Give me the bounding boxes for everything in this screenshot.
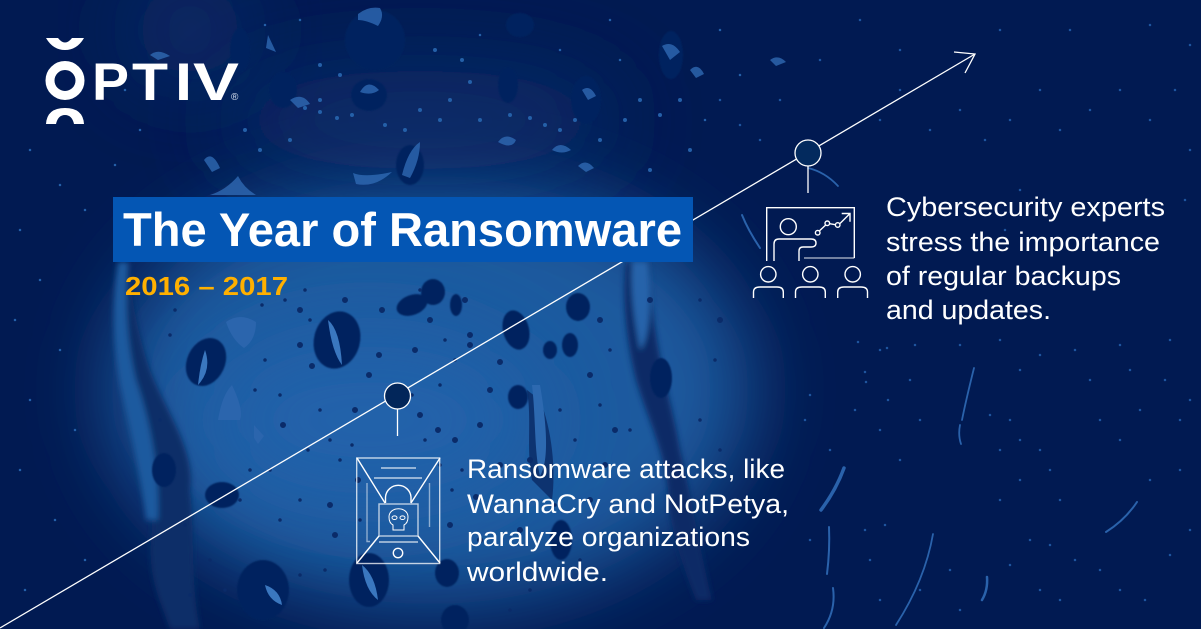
- text: cybersecurity experts: and updates.: [886, 295, 1051, 325]
- title banner: The Year of Ransomware: [123, 203, 682, 256]
- lighter drops and highlights: [150, 8, 786, 195]
- icon: skull: [389, 509, 408, 530]
- text: cybersecurity experts: Cybersecurity experts: [886, 192, 1165, 222]
- text: cybersecurity experts: [886, 192, 1165, 325]
- streaks, right: [742, 168, 1137, 628]
- logo wordmark: V: [193, 53, 239, 112]
- logo mark: [46, 38, 84, 124]
- date range: 2016 – 2017: [125, 271, 288, 301]
- logo wordmark: [92, 53, 239, 112]
- large dark drops: [152, 10, 683, 629]
- logo: Optiv: [46, 38, 239, 124]
- icon: presenter and audience: [754, 208, 868, 298]
- text: ransomware attacks: worldwide.: [466, 557, 608, 587]
- logo wordmark: T: [132, 53, 168, 112]
- logo wordmark: P: [92, 53, 129, 112]
- logo wordmark: I: [175, 53, 192, 112]
- registered mark: ®: [231, 92, 239, 103]
- text: cybersecurity experts: stress the importance: [886, 227, 1160, 257]
- icon: locked device with skull: [357, 458, 440, 564]
- small dark droplets: [160, 290, 720, 610]
- blue patches in glow: [198, 317, 378, 605]
- node: upper timeline marker: [795, 140, 821, 193]
- text: ransomware attacks: Ransomware attacks, like: [467, 454, 785, 484]
- text: cybersecurity experts: of regular backups: [886, 261, 1121, 291]
- text: ransomware attacks: paralyze organizations: [467, 522, 750, 552]
- text: ransomware attacks: [466, 454, 789, 587]
- node: lower timeline marker: [384, 383, 410, 436]
- timeline arrow: [0, 52, 975, 628]
- text: ransomware attacks: WannaCry and NotPetya,: [467, 489, 789, 519]
- centre streak: [527, 390, 554, 500]
- right stream: [624, 262, 712, 600]
- left stream: [114, 262, 200, 629]
- small bright droplets, left and top: [15, 20, 740, 590]
- small bright droplets, right: [720, 20, 1190, 610]
